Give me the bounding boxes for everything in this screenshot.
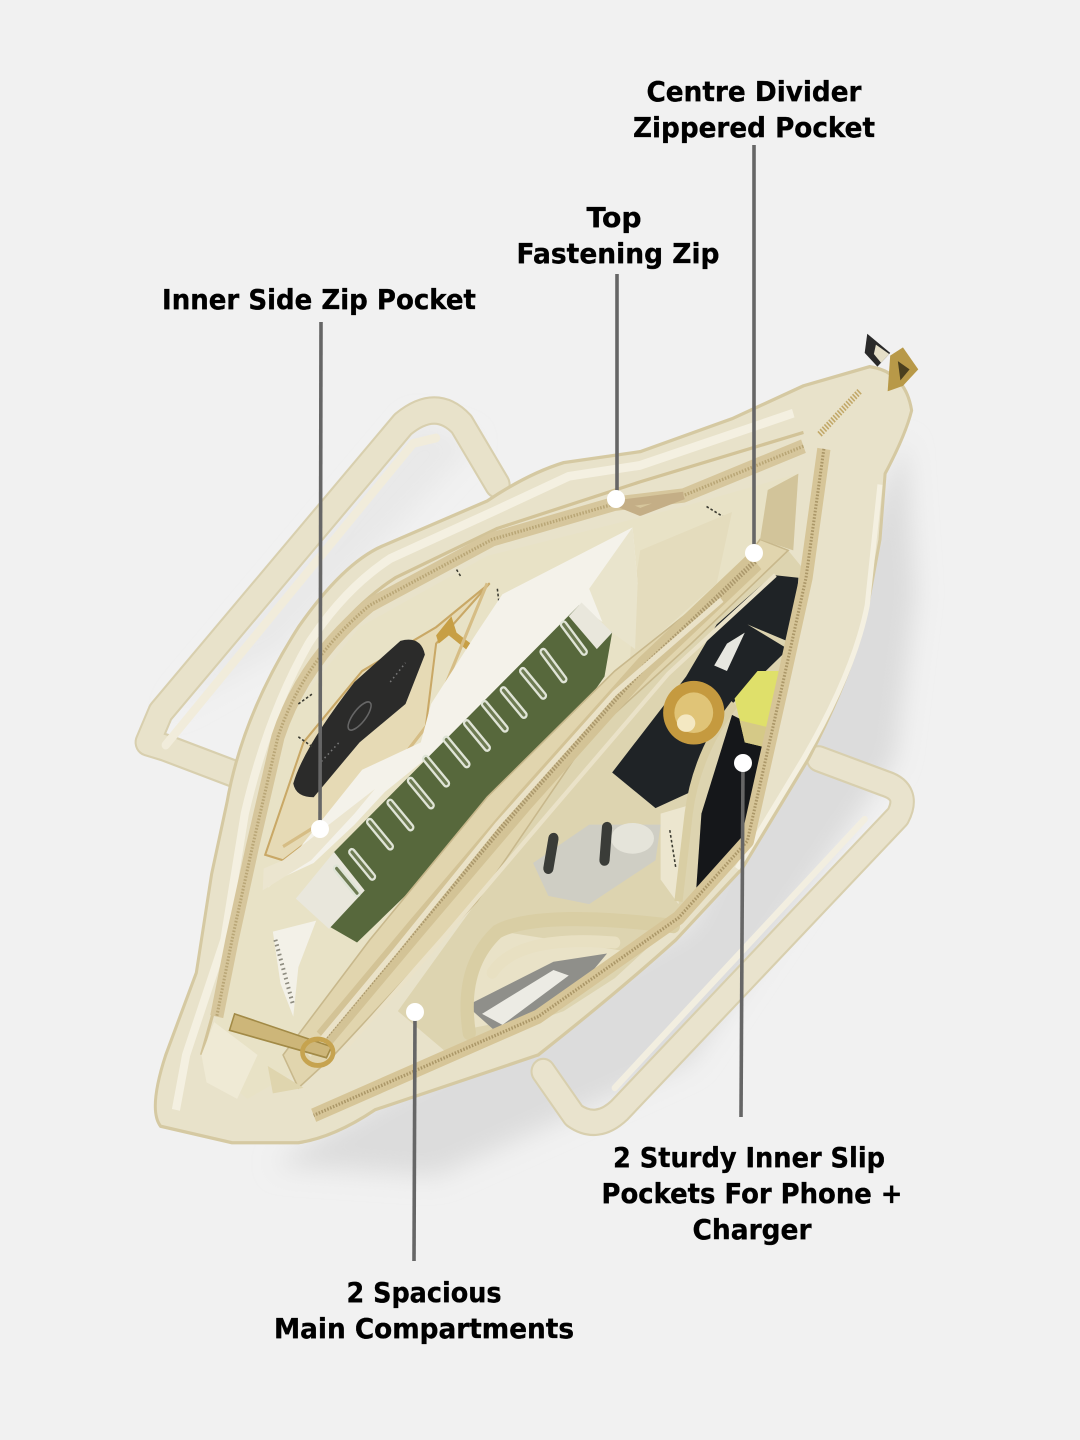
earbud case: [533, 823, 661, 904]
callout: Inner Side Zip Pocket: [162, 283, 476, 838]
centre divider with zip: [283, 539, 788, 1088]
spiral rings: [337, 624, 584, 893]
callout: Centre Divider Zippered Pocket: [633, 75, 875, 562]
back handle: [148, 411, 497, 781]
top corner zipper pull: [865, 334, 918, 391]
dark bottle and phone charger: [612, 575, 798, 808]
right and bottom zip: [314, 391, 860, 1115]
callout: 2 Sturdy Inner Slip Pockets: 2 Sturdy Inner Slip: [613, 1141, 885, 1174]
front slip pocket: [661, 671, 788, 918]
corner lining with gold zip pull: [201, 1014, 333, 1099]
white book block: [268, 527, 638, 888]
callout: 2 Spacious Main Compartments: Main Compartments: [274, 1312, 574, 1345]
green notebook: [296, 602, 612, 943]
callout: Top Fastening Zip: Top: [586, 201, 642, 234]
divider end lining: [760, 474, 798, 550]
callout: Top Fastening Zip: [516, 201, 720, 508]
bag photo illustration: [148, 334, 918, 1176]
front handle: [543, 759, 902, 1122]
map lining prints: [298, 506, 724, 748]
right compartment interior: [398, 550, 806, 1052]
page edge and ticket: [273, 921, 316, 1017]
soft shadow: [166, 419, 916, 1176]
yellow item: [735, 671, 788, 748]
outer rim highlights: [176, 413, 880, 1110]
callout: Inner Side Zip Pocket: Inner Side Zip Pocket: [162, 283, 476, 316]
top fastening zip: [217, 446, 803, 1017]
callout: 2 Sturdy Inner Slip Pockets: [602, 754, 902, 1246]
callout: 2 Sturdy Inner Slip Pockets: Pockets For Phone +: [602, 1177, 902, 1210]
pocket flap: [263, 789, 375, 890]
gold slider: [436, 616, 474, 652]
gold coin clasp: [663, 681, 724, 745]
phone: [293, 640, 425, 797]
callout: 2 Sturdy Inner Slip Pockets: Charger: [692, 1213, 812, 1246]
callout: Top Fastening Zip: Fastening Zip: [516, 237, 720, 270]
upper lining fold: [630, 512, 732, 660]
inner side zip pocket: [265, 583, 490, 860]
callout: 2 Spacious Main Compartments: [274, 1003, 574, 1345]
callout: 2 Spacious Main Compartments: 2 Spacious: [346, 1276, 502, 1309]
lower pocket with metal clip: [467, 919, 673, 1033]
bag outer body: [155, 367, 912, 1143]
callout: Centre Divider Zippered Pocket: Zippered Pocket: [633, 111, 875, 144]
notebook paper ends: [296, 602, 612, 929]
callout: Centre Divider Zippered Pocket: Centre Divider: [646, 75, 862, 108]
left compartment interior: [201, 474, 798, 1099]
